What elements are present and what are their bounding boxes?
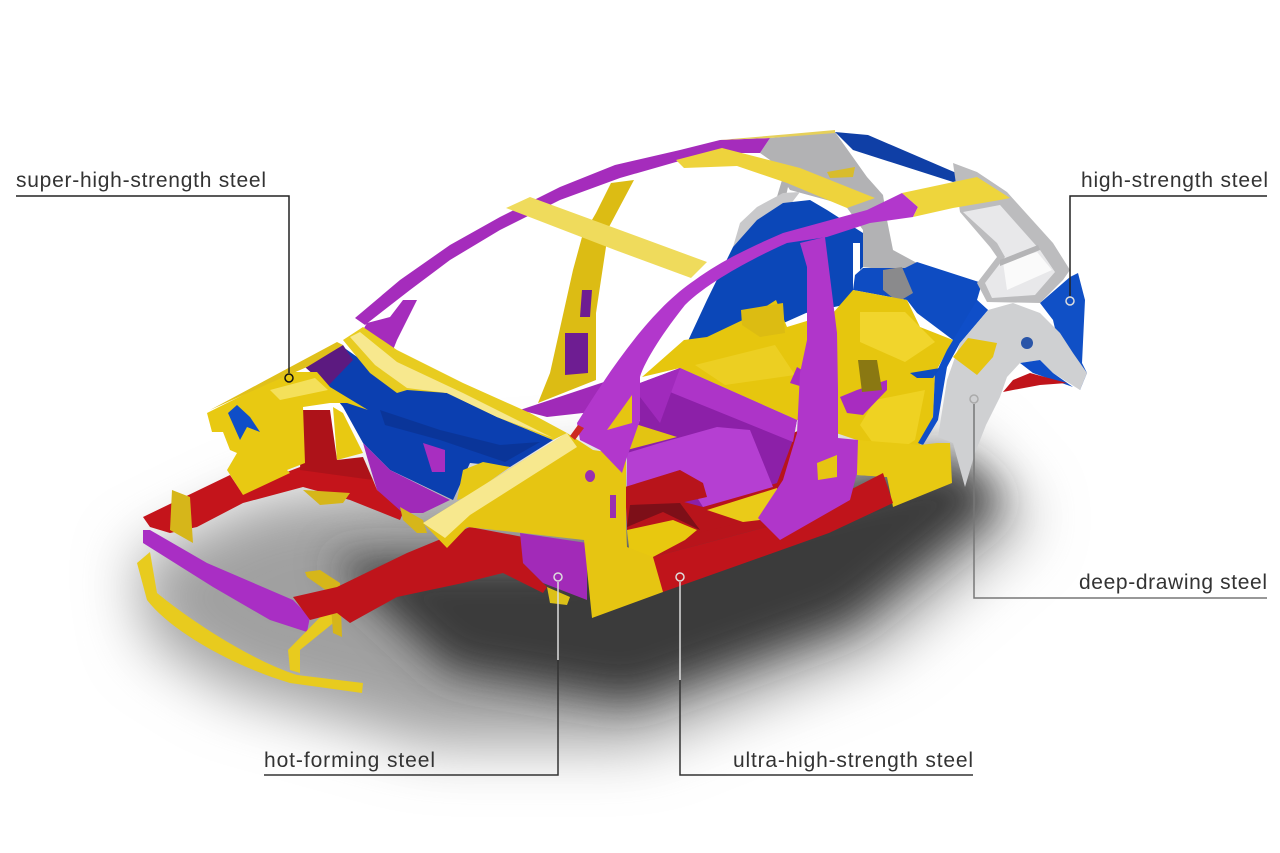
front suspension tower in yellow (170, 342, 427, 543)
callout: ultra-high-strength steel (676, 573, 973, 775)
front cross members in red (625, 470, 740, 533)
callout: deep-drawing steel (970, 395, 1267, 598)
dark underfloor backing (627, 430, 800, 557)
near B-pillar in purple (758, 237, 858, 540)
callout: high-strength steel: high-strength steel (1081, 169, 1268, 192)
front rail in red (143, 410, 403, 533)
car body structure (137, 130, 1087, 693)
rear corner panel in blue (910, 273, 1087, 445)
rear inner wheelhouse in blue (687, 200, 988, 347)
callout: deep-drawing steel: deep-drawing steel (1079, 571, 1267, 594)
callout: ultra-high-strength steel: ultra-high-strength steel (733, 749, 973, 772)
firewall in blue (305, 345, 553, 513)
front longitudinal in red (293, 527, 547, 623)
windshield lower cross member in yellow (343, 327, 567, 440)
rear sill in yellow (857, 440, 952, 507)
callout: super-high-strength steel (16, 169, 293, 382)
near A-pillar and roof rail in purple (570, 177, 1010, 473)
near side A-pillar panel in yellow (423, 433, 663, 618)
lower bumper in yellow (137, 552, 363, 693)
callout: hot-forming steel (264, 573, 562, 775)
floor front in yellow (627, 488, 780, 557)
rear wheel arch in grey (938, 303, 1087, 487)
callout: high-strength steel (1066, 169, 1268, 305)
centre tunnel in purple (607, 360, 887, 507)
ground shadow (135, 440, 1030, 745)
callout: hot-forming steel: hot-forming steel (264, 749, 435, 772)
wheel well in purple (520, 533, 587, 605)
rear window frame in grey and white (953, 163, 1070, 303)
far side roof rail, pillars and cross members (355, 130, 875, 417)
far rear pillar in grey (733, 132, 968, 272)
bumper beam in purple (143, 530, 310, 632)
cabin floor in yellow (642, 290, 953, 477)
callout: super-high-strength steel: super-high-strength steel (16, 169, 266, 192)
side sill in red (653, 473, 893, 592)
